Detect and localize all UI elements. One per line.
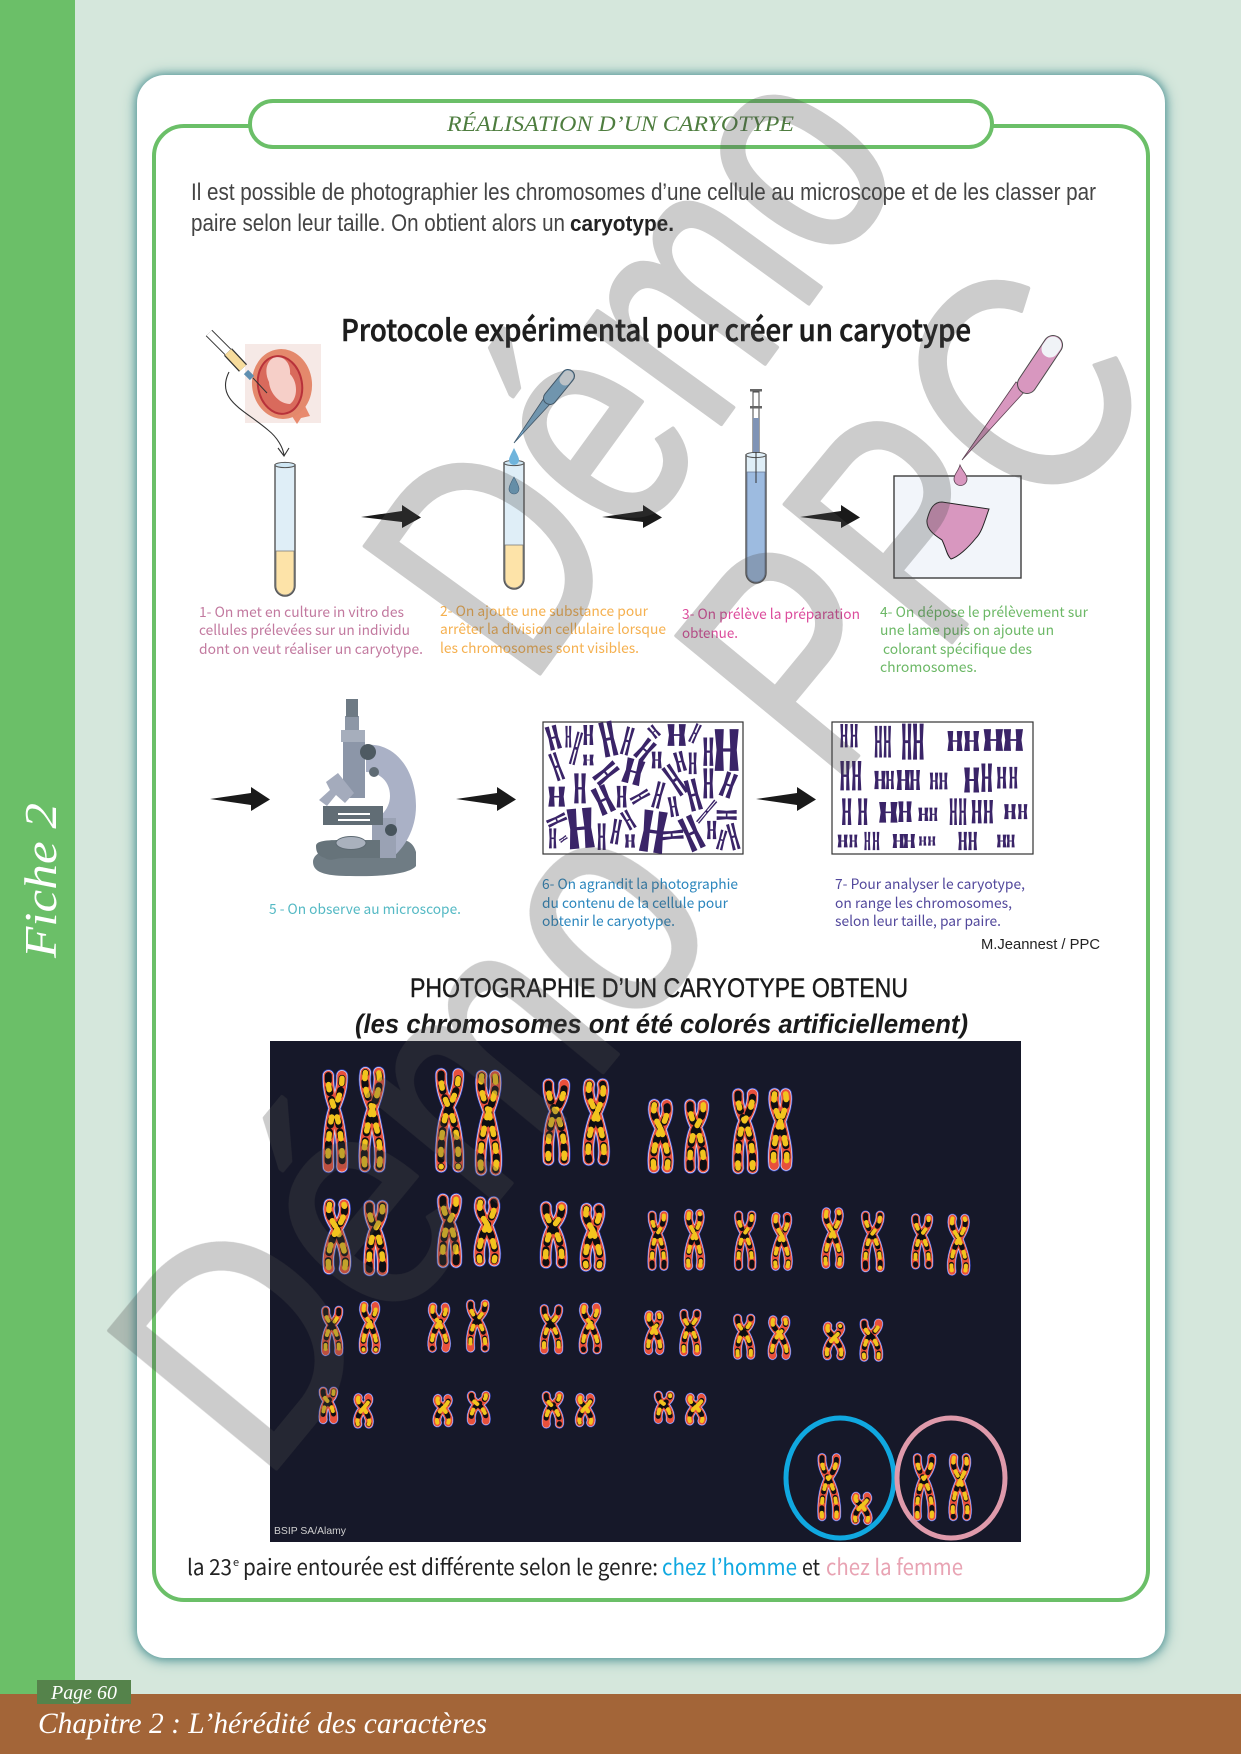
icon: microscope: [313, 699, 416, 876]
footer band: [0, 1694, 1241, 1754]
karyotype photograph: [270, 1041, 1021, 1542]
arrow 2: [602, 505, 662, 528]
step 4 caption: une lame puis on ajoute un: [880, 620, 1054, 640]
title pill: RÉALISATION D’UN CARYOTYPE: [446, 111, 795, 136]
step 3 caption: 3- On prélève la préparation: [682, 604, 860, 624]
bottom note: chez l’homme: [662, 1550, 797, 1582]
intro text: [191, 179, 1096, 237]
arrow 5: [456, 787, 516, 811]
chapter title: Chapitre 2 : L’hérédité des caractères: [38, 1707, 487, 1740]
curved arrow to tube: [225, 372, 289, 456]
intro text: caryotype.: [570, 211, 674, 236]
bottom note: e: [233, 1554, 239, 1570]
watermark: Démo: [42, 741, 778, 1529]
icon: microscope slide with sample: [894, 476, 1021, 578]
icon: test tube 2 with drops: [504, 448, 524, 589]
protocol heading: Protocole expérimental pour créer un caryotype: [341, 306, 971, 350]
step 1 caption: [199, 602, 423, 659]
step 4 caption: chromosomes.: [880, 657, 977, 677]
step 6 caption: obtenir le caryotype.: [542, 911, 675, 931]
step 7 caption: on range les chromosomes,: [835, 893, 1012, 913]
page number tag: Page 60: [50, 1682, 117, 1704]
step 4 caption: [880, 602, 1089, 677]
intro text: paire selon leur taille. On obtient alors un: [191, 210, 565, 237]
green frame: [154, 126, 1148, 1600]
step 2 caption: [440, 601, 666, 658]
arrow 4: [210, 787, 270, 811]
arrow 3: [800, 505, 860, 528]
step 7 caption: [835, 874, 1025, 931]
step 4 caption: colorant spécifique des: [883, 639, 1032, 659]
icon: test tube 1: [275, 462, 295, 596]
bottom note: et: [802, 1550, 820, 1582]
step 7 caption: 7- Pour analyser le caryotype,: [835, 874, 1025, 894]
page number tag: [37, 1680, 131, 1704]
panel: sorted chromosomes: [832, 722, 1033, 854]
panel: scattered chromosomes: [543, 720, 743, 854]
icon: pink pipette and drop: [954, 345, 1053, 486]
credit: M.Jeannest / PPC: [981, 937, 1100, 953]
icon: uterus with fetus: [245, 344, 321, 424]
step 1 caption: cellules prélevées sur un individu: [199, 620, 410, 640]
bottom note: paire entourée est différente selon le genre:: [243, 1550, 658, 1582]
icon: syringe: [209, 333, 267, 393]
arrow 1: [361, 505, 421, 528]
side label: Fiche 2: Fiche 2: [15, 803, 66, 959]
intro text: Il est possible de photographier les chromosomes d’une cellule au microscope et de les classer par: [191, 179, 1096, 206]
step 3 caption: [682, 604, 860, 643]
photo credit: BSIP SA/Alamy: [274, 1525, 347, 1537]
icon: pipette with drop: [514, 376, 568, 443]
icon: syringe in test tube 3: [746, 389, 766, 583]
step 2 caption: les chromosomes sont visibles.: [440, 638, 639, 658]
step 7 caption: selon leur taille, par paire.: [835, 911, 1001, 931]
left side band: [0, 0, 75, 1694]
step 6 caption: 6- On agrandit la photographie: [542, 874, 738, 894]
title pill: [250, 101, 992, 147]
chromosome rows: [323, 1073, 967, 1521]
step 5 caption: 5 - On observe au microscope.: [269, 899, 461, 919]
step 2 caption: 2- On ajoute une substance pour: [440, 601, 649, 621]
arrow 6: [756, 787, 816, 811]
step 1 caption: 1- On met en culture in vitro des: [199, 602, 404, 622]
step 6 caption: du contenu de la cellule pour: [542, 893, 729, 913]
photo subheading: (les chromosomes ont été colorés artificiellement): [355, 1009, 968, 1039]
photo heading: PHOTOGRAPHIE D’UN CARYOTYPE OBTENU: [410, 973, 908, 1003]
step 1 caption: dont on veut réaliser un caryotype.: [199, 639, 423, 659]
bottom note: chez la femme: [826, 1550, 963, 1582]
bottom note: la 23: [187, 1550, 232, 1582]
bottom note: [187, 1550, 963, 1582]
step 6 caption: [542, 874, 738, 931]
step 3 caption: obtenue.: [682, 623, 738, 643]
circle: female pair: [897, 1418, 1005, 1538]
step 2 caption: arrêter la division cellulaire lorsque: [440, 619, 666, 639]
circle: male pair: [786, 1418, 894, 1538]
white card: [137, 75, 1165, 1658]
step 4 caption: 4- On dépose le prélèvement sur: [880, 602, 1089, 622]
